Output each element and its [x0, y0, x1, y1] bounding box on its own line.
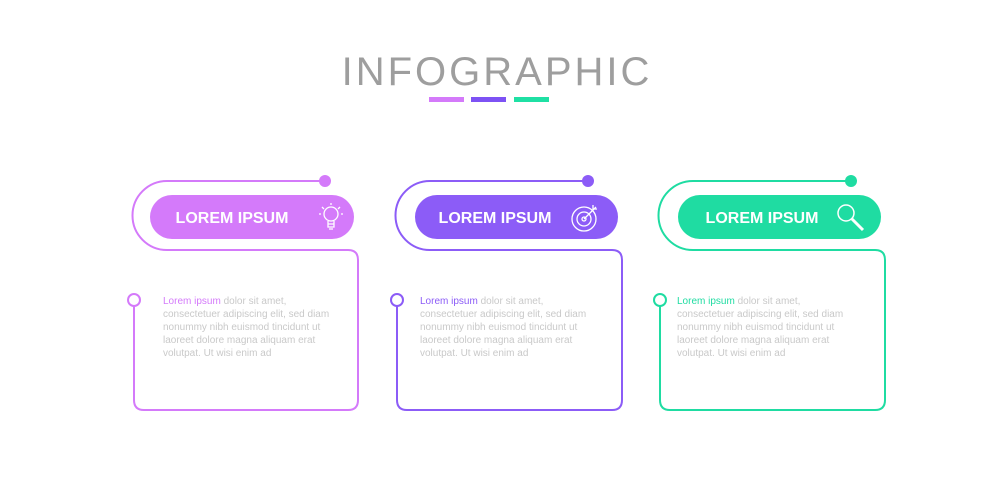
title: INFOGRAPHIC	[342, 50, 652, 94]
panel: 1	[128, 175, 358, 410]
text block: volutpat. Ut wisi enim ad	[677, 348, 785, 359]
dot	[319, 175, 331, 187]
icon: light bulb	[319, 203, 343, 229]
outline path	[658, 181, 885, 410]
outline path	[133, 181, 358, 410]
pill header: LOREM IPSUM	[706, 210, 818, 227]
title underline bars	[429, 97, 549, 102]
text block: consectetuer adipiscing elit, sed diam	[163, 309, 329, 320]
pill header	[678, 195, 881, 239]
icon: target	[572, 205, 597, 231]
ring	[654, 294, 666, 306]
text block: Lorem ipsum dolor sit amet,	[677, 296, 800, 307]
text block: nonummy nibh euismod tincidunt ut	[420, 322, 578, 333]
pill header	[150, 195, 354, 239]
text block: consectetuer adipiscing elit, sed diam	[677, 309, 843, 320]
dot	[582, 175, 594, 187]
ring	[128, 294, 140, 306]
text block: laoreet dolore magna aliquam erat	[420, 335, 573, 346]
text block: nonummy nibh euismod tincidunt ut	[163, 322, 321, 333]
text block: laoreet dolore magna aliquam erat	[163, 335, 316, 346]
dot	[845, 175, 857, 187]
text block: Lorem ipsum dolor sit amet,	[163, 296, 286, 307]
text block: Lorem ipsum dolor sit amet,	[420, 296, 543, 307]
ring	[391, 294, 403, 306]
pill header: LOREM IPSUM	[439, 210, 551, 227]
text block: laoreet dolore magna aliquam erat	[677, 335, 830, 346]
panel: 2	[391, 175, 622, 410]
text block: volutpat. Ut wisi enim ad	[420, 348, 528, 359]
text block: nonummy nibh euismod tincidunt ut	[677, 322, 835, 333]
outline path	[396, 181, 622, 410]
text block: consectetuer adipiscing elit, sed diam	[420, 309, 586, 320]
panel: 3	[654, 175, 885, 410]
pill header: LOREM IPSUM	[176, 210, 288, 227]
text block: volutpat. Ut wisi enim ad	[163, 348, 271, 359]
pill header	[415, 195, 618, 239]
icon: magnifier	[838, 205, 863, 230]
